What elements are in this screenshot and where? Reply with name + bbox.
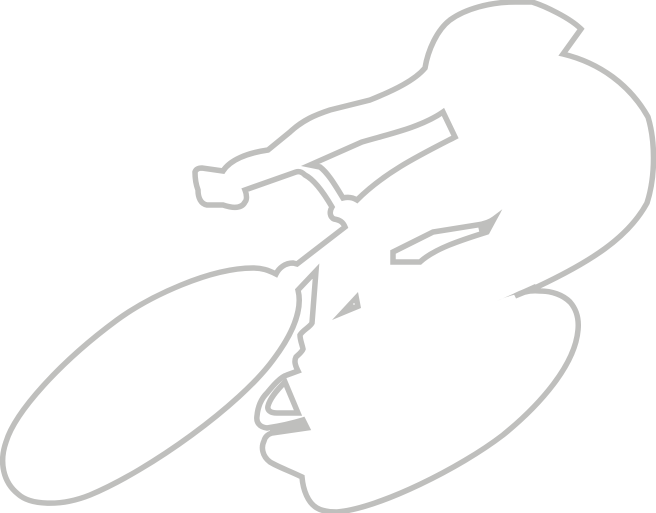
thigh gap shape bbox=[393, 219, 494, 262]
seat thick band bbox=[270, 418, 307, 435]
solid frame triangle bbox=[332, 292, 361, 320]
frame triangle under saddle bbox=[268, 382, 298, 413]
triangle highlight bbox=[353, 303, 355, 305]
rear wheel sharp tip bbox=[497, 284, 545, 301]
forearm gap shape bbox=[310, 112, 455, 200]
thigh sharp tip bbox=[478, 212, 501, 235]
